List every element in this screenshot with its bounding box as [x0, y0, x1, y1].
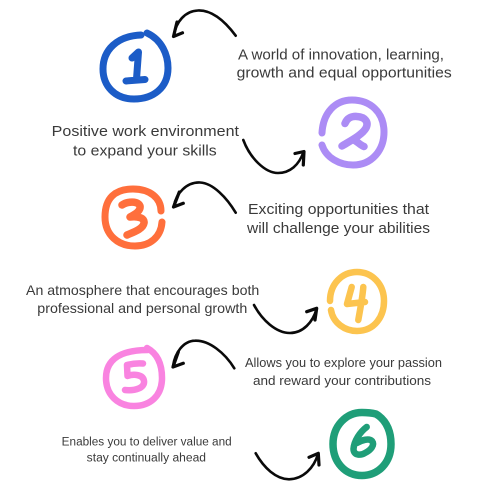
- text: item 2 description: to expand your skills: [73, 143, 217, 160]
- text: item 5 description: Allows you to explore your passion: [245, 356, 442, 370]
- text: item 1 description: A world of innovation, learning,: [238, 46, 444, 63]
- text: item 6 description: stay continually ahead: [87, 453, 206, 465]
- item 6: green numbered badge: [333, 412, 391, 476]
- arrow to badge 5: [173, 341, 234, 368]
- item 4: yellow numbered badge: [330, 272, 384, 331]
- text: item 5 description: and reward your contributions: [253, 374, 431, 388]
- text: item 1 description: [237, 46, 452, 81]
- item 3: orange numbered badge: [105, 189, 162, 246]
- text: item 6 description: Enables you to deliver value and: [62, 437, 232, 449]
- text: item 2 description: [52, 123, 240, 160]
- arrow to badge 1: [174, 10, 236, 36]
- text: item 4 description: [26, 282, 259, 316]
- arrow to badge 4: [254, 305, 317, 333]
- arrow to badge 6: [256, 453, 319, 479]
- item 1: blue numbered badge: [103, 33, 168, 99]
- text: item 4 description: An atmosphere that encourages both: [26, 282, 259, 298]
- text: item 3 description: will challenge your abilities: [246, 221, 430, 237]
- text: item 6 description: [62, 437, 232, 465]
- text: item 1 description: growth and equal opportunities: [237, 64, 452, 81]
- text: item 4 description: professional and personal growth: [37, 300, 247, 316]
- arrow to badge 2: [243, 140, 304, 173]
- item 2: purple numbered badge: [322, 100, 384, 165]
- text: item 3 description: Exciting opportunities that: [248, 202, 429, 218]
- arrow to badge 3: [174, 182, 236, 213]
- text: item 5 description: [245, 356, 442, 388]
- item 5: pink numbered badge: [106, 348, 162, 406]
- text: item 2 description: Positive work environment: [52, 123, 240, 140]
- text: item 3 description: [246, 202, 430, 237]
